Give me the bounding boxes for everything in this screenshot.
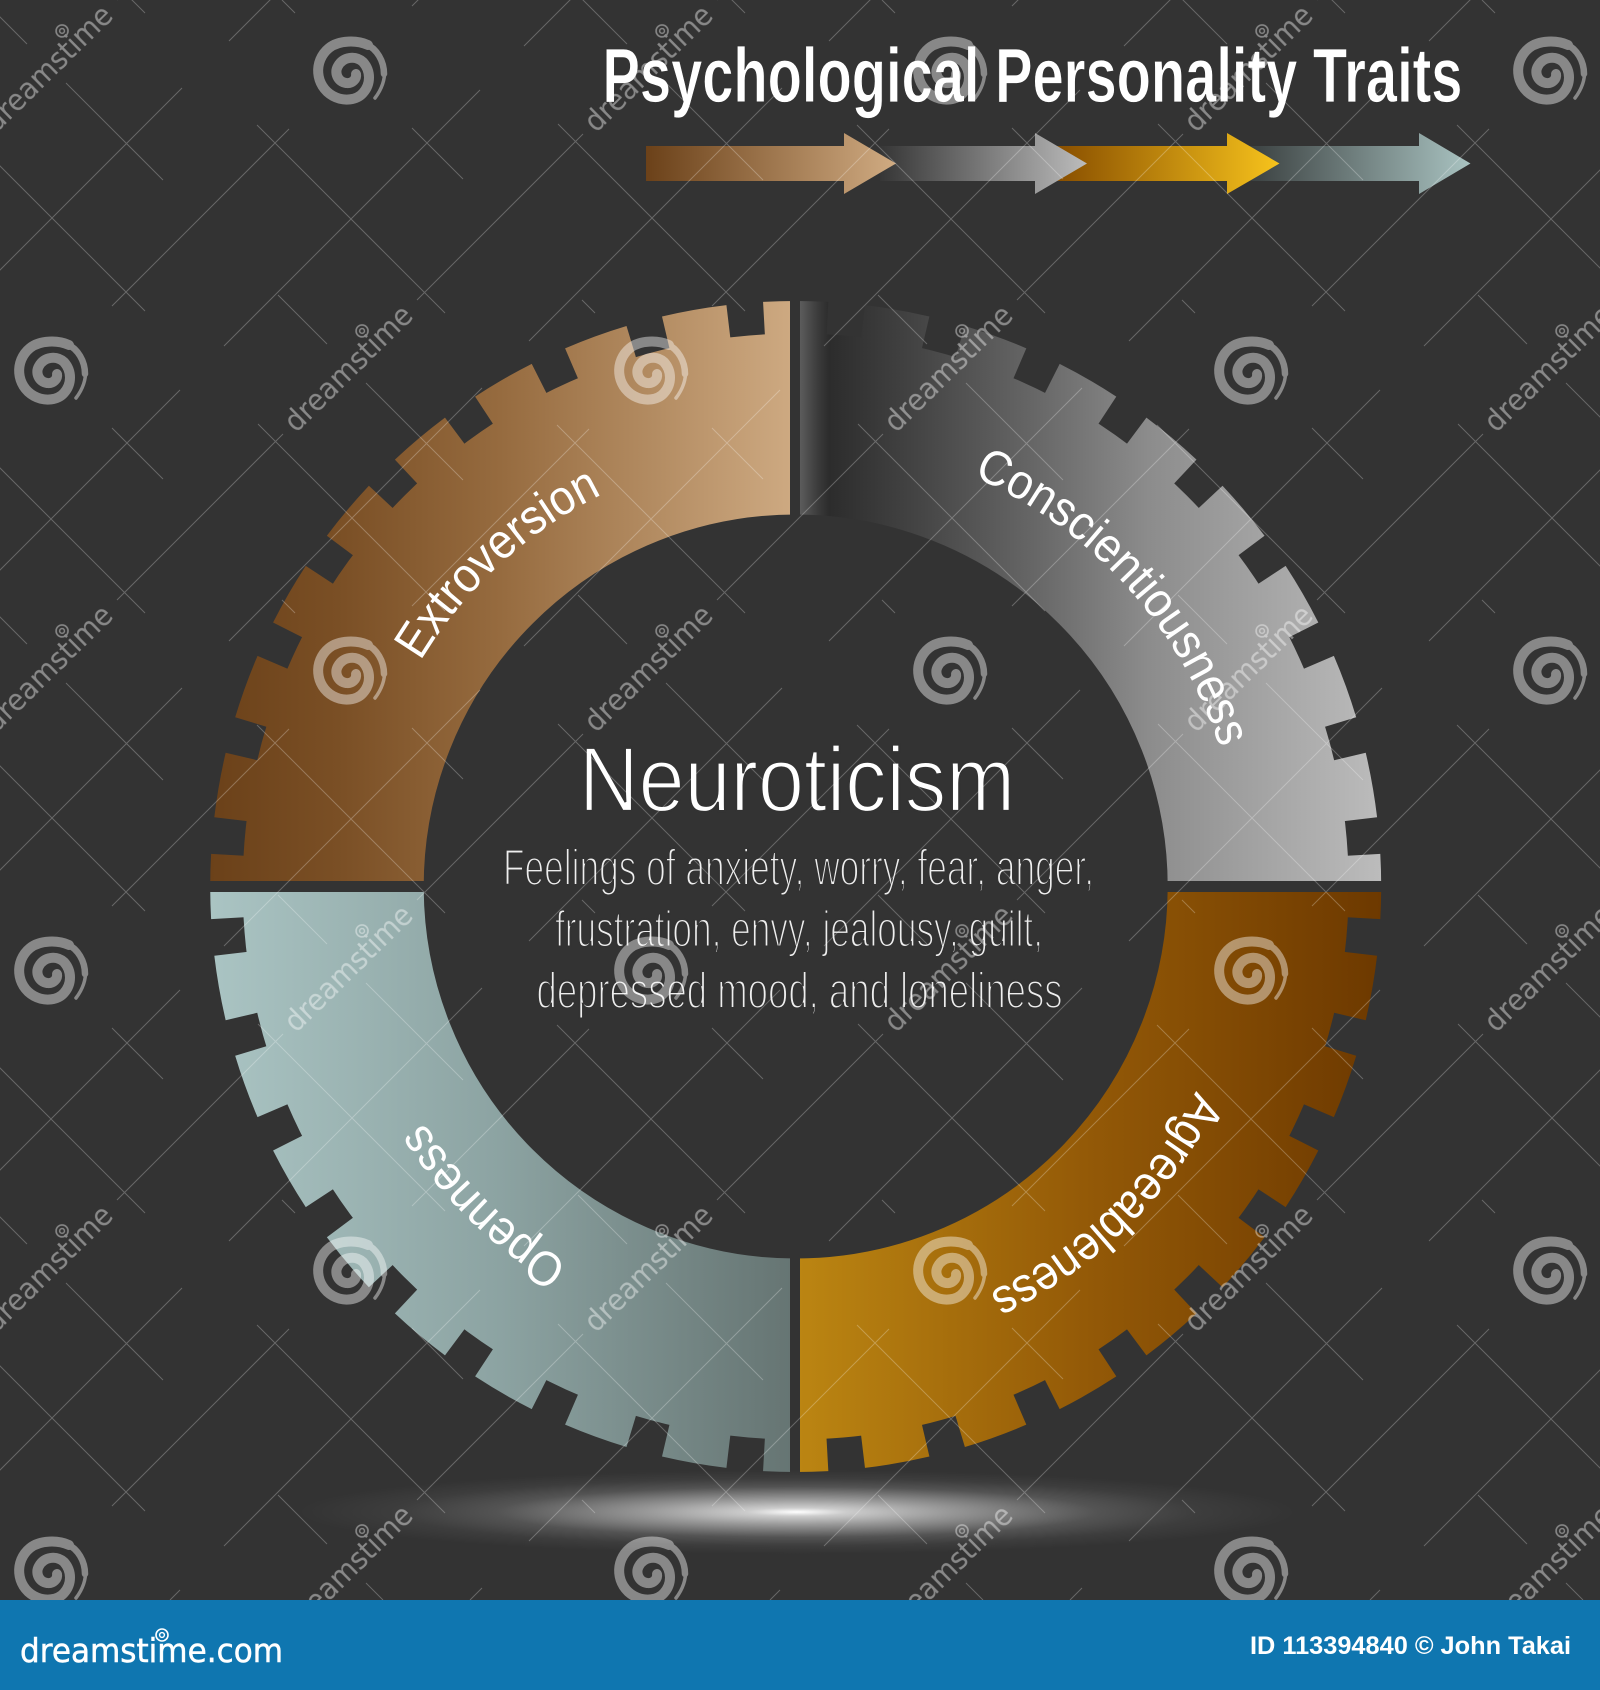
- watermark overlay: dreamstime: [877, 898, 1019, 1039]
- watermark overlay: dreamstime: [877, 298, 1019, 439]
- label: openness: Openness: [406, 1126, 561, 1286]
- arrow: teal: [1240, 133, 1470, 194]
- center description: [503, 839, 1094, 1019]
- watermark overlay: dreamstime: [577, 598, 719, 739]
- panel: gear ring: [210, 301, 1382, 1472]
- label: agreeableness: Agreeableness: [993, 1091, 1220, 1312]
- watermark overlay: dreamstime: [1177, 598, 1319, 739]
- segment: conscientiousness: [800, 290, 1390, 881]
- segment: openness: [200, 892, 790, 1482]
- segment: agreeableness: [800, 892, 1390, 1482]
- label: extroversion: Extroversion: [394, 474, 600, 658]
- watermark overlay: dreamstime: [277, 1498, 419, 1639]
- center description: frustration, envy, jealousy, guilt,: [555, 900, 1043, 958]
- arrow row legend: [646, 133, 1470, 194]
- center heading: Neuroticism: [579, 729, 1015, 831]
- watermark overlay: dreamstime: [877, 1498, 1019, 1639]
- watermark overlay: dreamstime: [277, 898, 419, 1039]
- footer credit: ID 113394840 © John Takai: [1250, 1632, 1571, 1660]
- watermark overlay: dreamstime: [577, 1198, 719, 1339]
- center description: depressed mood, and loneliness: [536, 962, 1062, 1019]
- label: conscientiousness: Conscientiousness: [980, 451, 1242, 744]
- center description: Feelings of anxiety, worry, fear, anger,: [503, 839, 1094, 896]
- arrow: grey: [880, 133, 1087, 194]
- watermark overlay: dreamstime: [277, 298, 419, 439]
- footer logo: dreamstime.com: [20, 1631, 283, 1670]
- footer bar: [0, 1600, 1600, 1690]
- watermark overlay: dreamstime: [1177, 1198, 1319, 1339]
- floor glow: [297, 1470, 1297, 1554]
- segment: extroversion: [200, 290, 790, 881]
- arrow: gold: [1050, 133, 1280, 194]
- arrow: bronze: [646, 133, 896, 194]
